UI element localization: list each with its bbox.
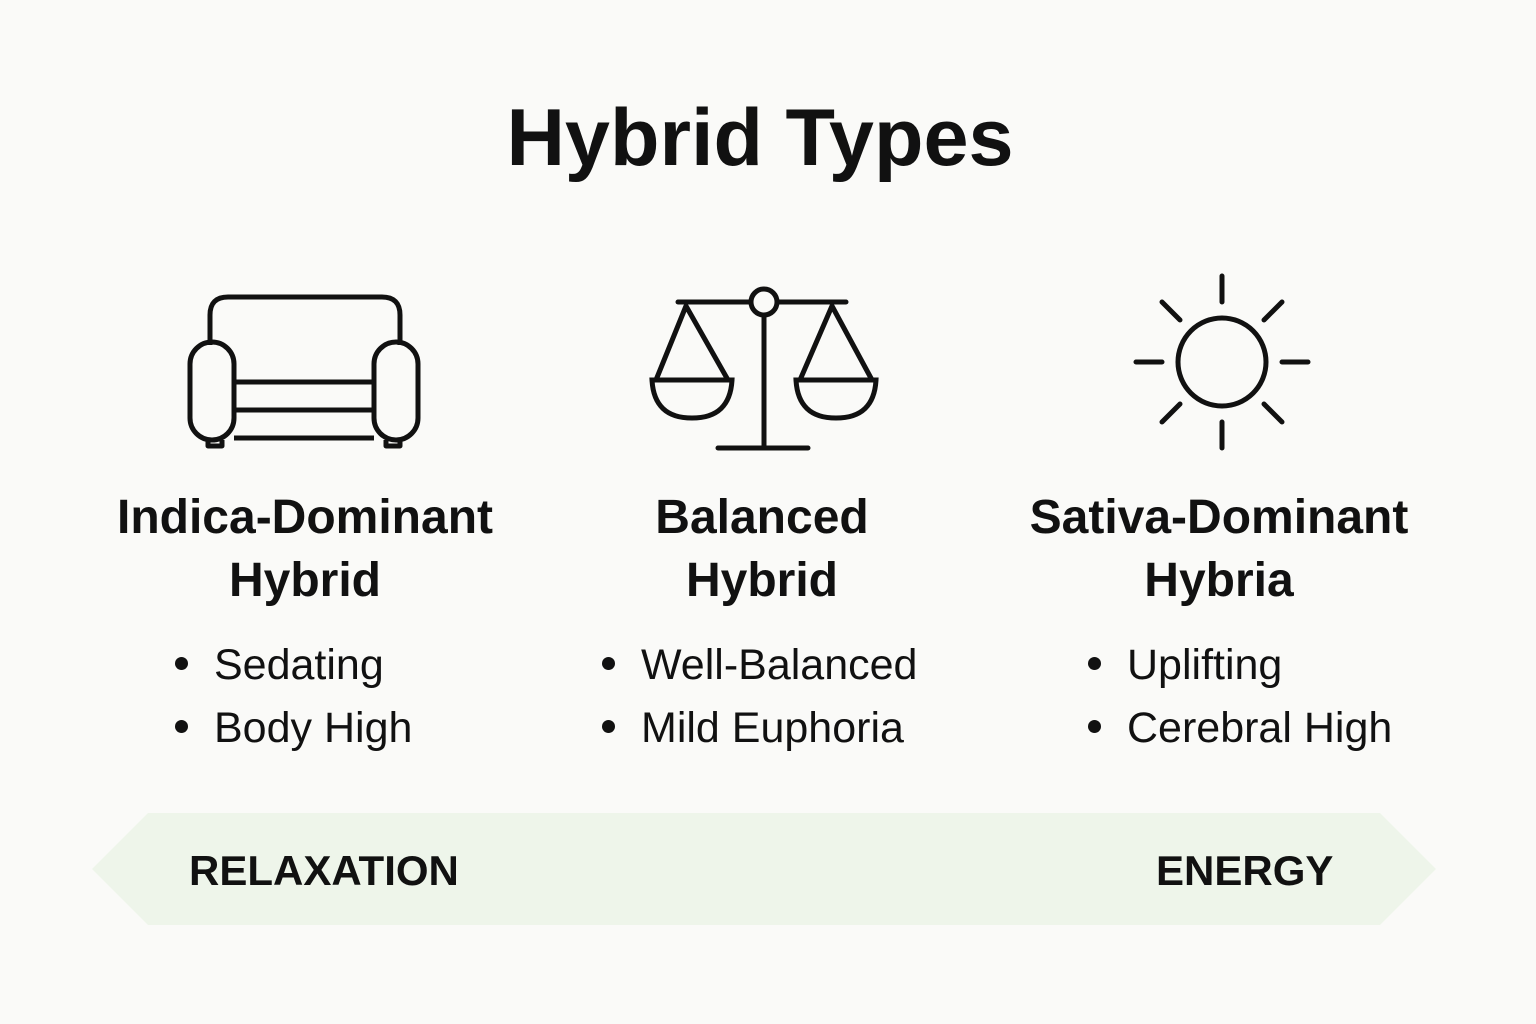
- bullets: indica: [175, 641, 412, 752]
- arrow band: [92, 813, 1436, 925]
- bullets: indica: Sedating: [214, 641, 384, 689]
- panel: indica: [117, 491, 493, 752]
- bullets: balanced: [602, 641, 917, 752]
- bullets: sativa: [1088, 641, 1392, 752]
- label: relaxation: RELAXATION: [189, 847, 459, 894]
- label: energy: ENERGY: [1156, 847, 1333, 894]
- icon: sun: [1134, 274, 1310, 450]
- panel: sativa: [1030, 491, 1408, 752]
- heading: indica: Hybrid: [229, 554, 381, 607]
- heading: indica: [117, 491, 493, 607]
- bullets: balanced: Well-Balanced: [641, 641, 917, 689]
- heading: sativa: Hybria: [1144, 554, 1294, 607]
- heading: sativa: Sativa-Dominant: [1030, 491, 1408, 544]
- bullets: sativa: Uplifting: [1127, 641, 1282, 689]
- bullets: indica: Body High: [214, 704, 412, 752]
- icon: couch: [188, 294, 420, 448]
- title: Hybrid Types: [506, 93, 1014, 183]
- heading: sativa: [1030, 491, 1408, 607]
- heading: balanced: [655, 491, 869, 607]
- bullets: sativa: Cerebral High: [1127, 704, 1392, 752]
- heading: balanced: Hybrid: [686, 554, 838, 607]
- icon: scale: [649, 286, 879, 450]
- panel: balanced: [602, 491, 917, 752]
- heading: balanced: Balanced: [655, 491, 869, 544]
- heading: indica: Indica-Dominant: [117, 491, 493, 544]
- bullets: balanced: Mild Euphoria: [641, 704, 904, 752]
